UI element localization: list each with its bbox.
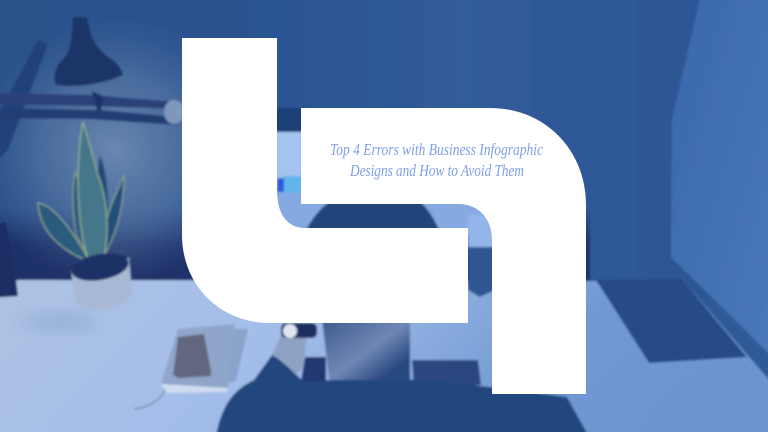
speaker [468, 247, 495, 297]
title line 1: Top 4 Errors with Business Infographic [330, 140, 543, 159]
phone [173, 334, 211, 378]
notebook [134, 324, 248, 409]
right wall [671, 0, 768, 365]
laptop [596, 279, 747, 363]
keyboard [300, 357, 481, 388]
person torso [215, 355, 592, 432]
plant pot [69, 249, 132, 310]
white logo shape: right stroke [301, 108, 586, 394]
wristwatch and arm [272, 323, 317, 375]
desk surface [0, 279, 768, 432]
monitor [270, 108, 498, 250]
title [330, 140, 543, 180]
person head [305, 200, 440, 385]
title line 2: Designs and How to Avoid Them [349, 161, 524, 180]
desk lamp [0, 17, 184, 298]
back wall [0, 0, 768, 300]
white logo shape: left stroke [182, 38, 468, 323]
plant [38, 122, 124, 264]
desk shadow under plant [22, 313, 98, 331]
